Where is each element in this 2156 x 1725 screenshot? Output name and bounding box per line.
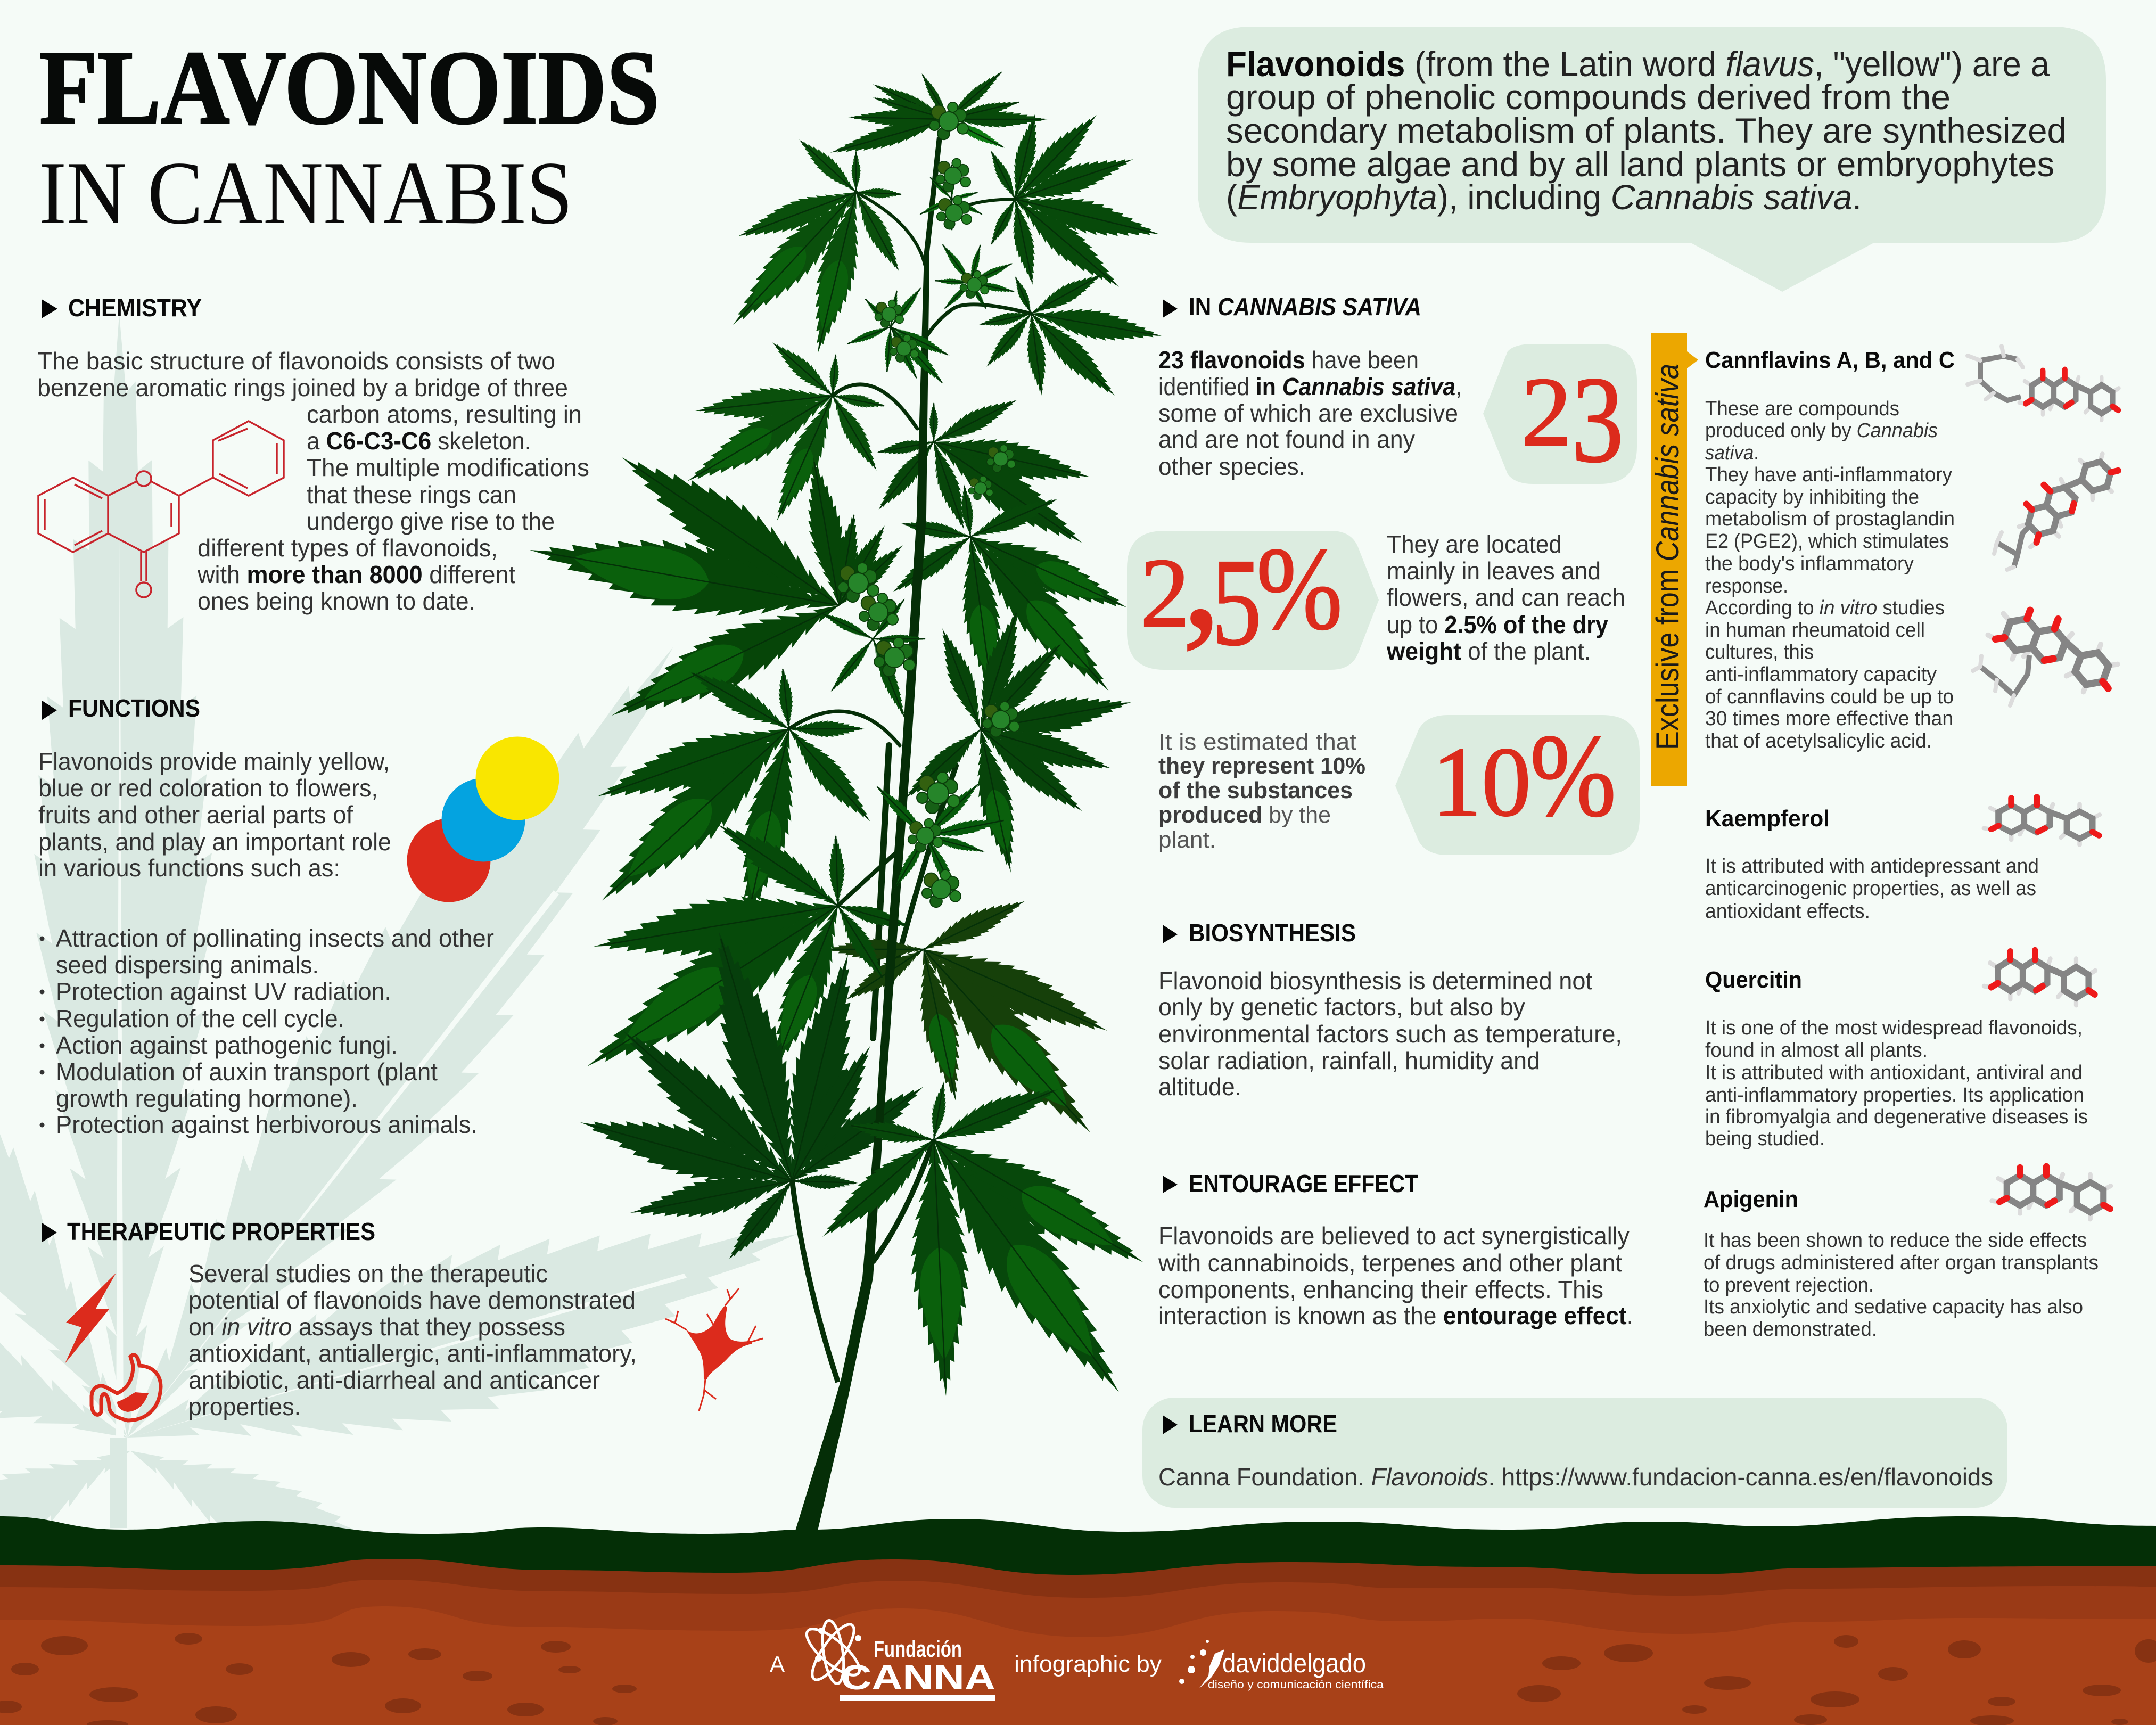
text: apigenin: of drugs administered after organ transplants [1704,1252,2099,1274]
stat bubble: 10%: % [1530,710,1616,841]
text: biosynthesis: environmental factors such as temperature, [1158,1020,1622,1048]
icon: lightning [65,1273,116,1363]
functions intro text: fruits and other aerial parts of [38,801,353,828]
text: quercitin [1705,1017,2088,1150]
text: quercitin: It is one of the most widespread flavonoids, [1705,1017,2083,1039]
icon: neuron [665,1288,763,1411]
therapeutic text: on in vitro assays that they possess [188,1313,565,1341]
flower: top [827,66,1048,163]
colour circles [407,737,559,902]
chemistry text: The multiple modifications [307,454,589,481]
intro speech bubble: (Embryophyta), including Cannabis sativa. [1226,177,1862,217]
leaf: large bottom left [574,923,934,1267]
heading: kaempferol: Kaempferol [1705,806,1830,832]
text: kaempferol [1705,855,2039,923]
functions intro text [38,748,391,882]
orange vertical banner [1650,333,1698,786]
text: 23 flavonoids [1158,346,1462,480]
text: cannflavins: the body's inflammatory [1705,553,1914,575]
leaf: left middle [582,660,880,929]
flower: fifth [818,596,926,721]
text: entourage effect: Flavonoids are believed to act synergistically [1158,1222,1630,1250]
functions bullet list [39,924,494,1138]
functions bullet list: Regulation of the cell cycle. [56,1005,344,1032]
text: they are located: weight of the plant. [1386,637,1591,665]
stat bubble: 2,5% [1127,484,1379,671]
functions bullet list: Modulation of auxin transport (plant [56,1058,438,1086]
text: it is estimated: plant. [1158,827,1216,853]
stat bubble: 10%: 10 [1432,727,1531,837]
text: quercitin: found in almost all plants. [1705,1039,1928,1062]
text: apigenin: It has been shown to reduce the side effects [1704,1229,2087,1252]
background pale cannabis leaf [0,314,820,1629]
text: biosynthesis: altitude. [1158,1073,1241,1100]
molecule: kaempferol [1984,797,2100,845]
therapeutic text: antioxidant, antiallergic, anti-inflammatory, [188,1340,637,1367]
intro speech bubble: Flavonoids (from the Latin word flavus, "yellow") are a [1226,44,2050,84]
molecule: quercitin [1984,950,2095,1005]
title [39,29,660,243]
text: kaempferol: antioxidant effects. [1705,900,1870,923]
text: entourage effect: interaction is known as the entourage effect. [1158,1302,1633,1329]
panel: learn more: Canna Foundation. Flavonoids. https://www.fundacion-canna.es/en/flavonoids [1158,1463,1993,1491]
text: entourage effect [1158,1222,1633,1329]
functions bullet list: seed dispersing animals. [56,951,319,979]
text: they are located: flowers, and can reach [1387,584,1625,611]
section: biosynthesis [1158,919,1622,1100]
text: cannflavins: sativa. [1705,442,1759,464]
molecule: cannflavin C [1973,598,2125,705]
stat bubble: 23 [1483,344,1637,488]
text: 23 flavonoids: some of which are exclusive [1158,399,1458,427]
flower bud clusters [838,102,1019,907]
text: they are located: mainly in leaves and [1387,557,1601,585]
leaf: left lower [569,811,912,1095]
stat bubble: 2,5%: 5 [1212,533,1262,671]
stat bubble: 2,5%: % [1256,523,1343,654]
soil layers [0,1516,2156,1725]
section: in cannabis sativa [1127,293,1640,855]
logo: fundacion canna: CANNA [841,1657,995,1697]
leaf: large bottom right [812,1075,1157,1413]
text: it is estimated: produced by the [1158,802,1331,828]
section: chemistry [37,294,589,615]
functions bullet list: Protection against UV radiation. [56,978,391,1005]
title: IN CANNABIS [39,143,573,243]
plant main stem [792,137,942,1531]
functions intro text: in various functions such as: [38,854,340,882]
stat bubble: 2,5%: 2 [1140,538,1190,648]
flower: fourth [844,284,952,389]
title: FLAVONOIDS [39,29,660,146]
leaf: middle right [886,484,1135,707]
flower: third [934,241,1016,311]
text: quercitin: being studied. [1705,1128,1825,1150]
stat bubble: 10% [1395,710,1640,855]
chemistry text: that these rings can [307,481,516,508]
chemistry text: different types of flavonoids, [198,534,498,562]
flavone chemical structure [38,421,284,597]
text: they are located [1386,530,1625,665]
text: cannflavins: 30 times more effective than [1705,708,1953,730]
heading: functions: FUNCTIONS [68,694,200,722]
heading: entourage effect: ENTOURAGE EFFECT [1189,1170,1418,1197]
text: cannflavins [1705,398,1955,752]
flower: sixth [871,778,1008,902]
heading: apigenin: Apigenin [1704,1186,1798,1212]
functions intro text: plants, and play an important role [38,828,391,856]
stat bubble: 2,5%: , [1182,484,1222,661]
footer credits [770,1619,1384,1701]
therapeutic text: potential of flavonoids have demonstrated [188,1286,636,1314]
text: it is estimated: of the substances [1158,777,1353,803]
intro speech bubble: secondary metabolism of plants. They are synthesized [1226,111,2067,150]
leaf: top left [718,133,908,358]
therapeutic text: antibiotic, anti-diarrheal and anticancer [188,1366,600,1394]
text: quercitin: anti-inflammatory properties. Its application [1705,1084,2084,1106]
functions intro text: Flavonoids provide mainly yellow, [38,748,390,775]
text: entourage effect: components, enhancing their effects. This [1158,1276,1603,1303]
text: quercitin: in fibromyalgia and degenerative diseases is [1705,1106,2088,1128]
text: cannflavins: According to in vitro studies [1705,597,1945,619]
panel: learn more: LEARN MORE [1189,1410,1337,1438]
text: it is estimated: they represent 10% [1158,753,1365,779]
chemistry text: ones being known to date. [198,587,475,615]
chemistry text: benzene aromatic rings joined by a bridge of three [37,374,568,401]
leaf: top right [985,106,1163,299]
text: 23 flavonoids: and are not found in any [1158,425,1415,453]
functions intro text: blue or red coloration to flowers, [38,774,378,802]
stat bubble: 23: 2 [1521,357,1572,467]
section: therapeutic properties [42,1218,763,1420]
functions bullet list: growth regulating hormone). [56,1085,358,1112]
text: biosynthesis: Flavonoid biosynthesis is determined not [1158,967,1592,995]
compound: kaempferol [1705,797,2100,923]
text: kaempferol: It is attributed with antidepressant and [1705,855,2039,877]
chemistry text: carbon atoms, resulting in [307,400,582,428]
text: cannflavins: response. [1705,575,1788,597]
orange vertical banner: Exclusive from Cannabis sativa [1650,364,1685,750]
section: functions [38,694,559,1138]
heading: chemistry: CHEMISTRY [68,294,202,322]
heading: therapeutic properties: THERAPEUTIC PROPERTIES [67,1218,375,1245]
molecule: apigenin [1992,1167,2111,1219]
chemistry text: with more than 8000 different [197,561,515,588]
text: biosynthesis [1158,967,1622,1100]
intro speech bubble [1198,27,2106,292]
text: 23 flavonoids: 23 flavonoids have been [1158,346,1419,374]
plant stems back [789,192,1031,1038]
logo: fundacion canna: Fundación [874,1636,962,1662]
text: apigenin: Its anxiolytic and sedative capacity has also [1704,1296,2083,1318]
heading: biosynthesis: BIOSYNTHESIS [1189,919,1356,947]
text: biosynthesis: only by genetic factors, but also by [1158,993,1525,1021]
text: apigenin: to prevent rejection. [1704,1274,1874,1296]
therapeutic text: properties. [188,1393,301,1420]
leaf: big left [523,433,910,741]
text: cannflavins: that of acetylsalicylic acid. [1705,730,1932,752]
compound: cannflavins [1705,346,2126,752]
text: cannflavins: in human rheumatoid cell [1705,619,1925,642]
text: cannflavins: E2 (PGE2), which stimulates [1705,530,1949,553]
stat bubble: 23: 3 [1571,351,1624,488]
flower: second [918,163,984,231]
therapeutic text [188,1260,637,1420]
functions bullet list: Attraction of pollinating insects and other [56,924,494,952]
section: entourage effect [1158,1170,1633,1329]
text: cannflavins: cultures, this [1705,641,1814,663]
text: they are located: up to 2.5% of the dry [1387,611,1608,638]
text: they are located: They are located [1387,530,1562,558]
heading: in cannabis sativa: IN CANNABIS SATIVA [1189,293,1421,321]
chemistry text: The basic structure of flavonoids consists of two [37,347,555,375]
text: 23 flavonoids: identified in Cannabis sativa, [1158,373,1462,400]
chemistry text: undergo give rise to the [307,507,555,535]
heading: quercitin: Quercitin [1705,967,1802,993]
chemistry text: a C6-C3-C6 skeleton. [307,427,531,455]
therapeutic text: Several studies on the therapeutic [188,1260,548,1287]
soil stones [0,1633,2156,1725]
leaf: upper left second [678,335,887,528]
compound: quercitin [1705,950,2095,1150]
leaf: central right with buds [897,605,1134,876]
leaf: upper right second [978,266,1164,405]
text: apigenin [1704,1229,2099,1341]
text: cannflavins: These are compounds [1705,398,1899,420]
footer credits: infographic by [1014,1651,1162,1677]
text: quercitin: It is attributed with antioxidant, antiviral and [1705,1062,2083,1084]
logo: fundacion canna [800,1619,995,1701]
chemistry text [37,347,589,615]
logo: david delgado [1179,1640,1384,1691]
text: it is estimated: It is estimated that [1158,729,1356,755]
icon: stomach [92,1355,161,1420]
panel: learn more [1142,1398,2007,1508]
functions bullet list: Protection against herbivorous animals. [56,1111,478,1138]
molecule: cannflavin A [1968,346,2119,420]
text: cannflavins: produced only by Cannabis [1705,420,1938,442]
text: 23 flavonoids: other species. [1158,453,1305,480]
text: apigenin: been demonstrated. [1704,1318,1877,1341]
functions bullet list: Action against pathogenic fungi. [56,1031,398,1059]
logo: david delgado: diseño y comunicación científica [1208,1679,1384,1691]
text: entourage effect: with cannabinoids, terpenes and other plant [1158,1249,1622,1277]
logo: david delgado: daviddelgado [1222,1648,1366,1678]
leaf: middle right upper [871,390,1094,560]
intro speech bubble: by some algae and by all land plants or embryophytes [1226,144,2054,184]
text: biosynthesis: solar radiation, rainfall, humidity and [1158,1047,1540,1074]
text: cannflavins: metabolism of prostaglandin [1705,508,1955,530]
text: cannflavins: of cannflavins could be up to [1705,686,1954,708]
text: cannflavins: capacity by inhibiting the [1705,486,1919,508]
text: cannflavins: anti-inflammatory capacity [1705,663,1937,686]
heading: cannflavins: Cannflavins A, B, and C [1705,347,1955,373]
molecule: cannflavin B [1994,440,2126,570]
compound: apigenin [1704,1167,2111,1341]
text: it is estimated [1158,729,1365,853]
text: cannflavins: They have anti-inflammatory [1705,464,1952,486]
leaf: brown lower right [826,890,1116,1151]
footer credits: A [770,1652,785,1677]
intro speech bubble: group of phenolic compounds derived from the [1226,77,1951,117]
text: kaempferol: anticarcinogenic properties, as well as [1705,877,2036,900]
